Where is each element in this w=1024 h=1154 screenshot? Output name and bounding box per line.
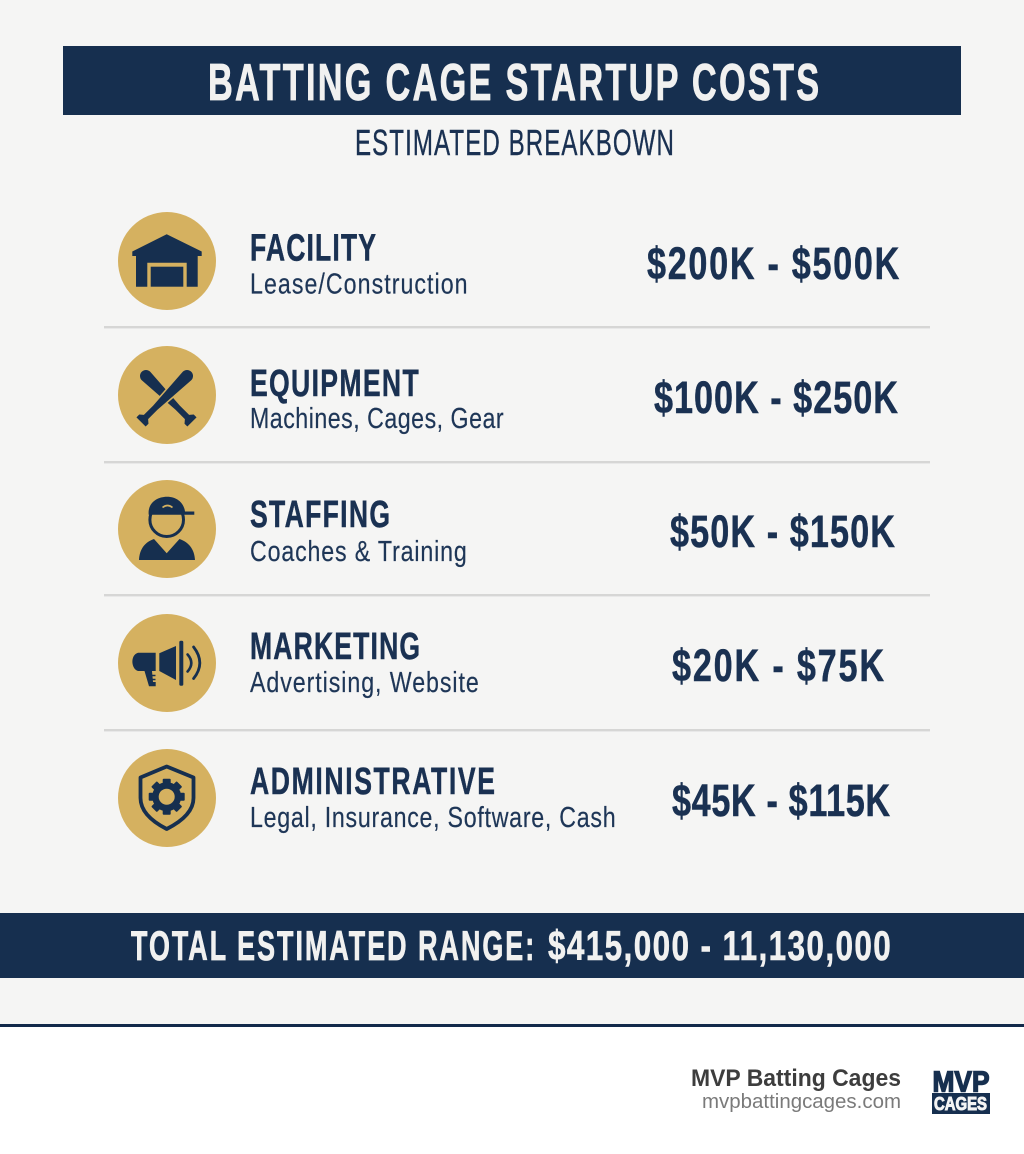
staffing cost: $50K - $150K	[670, 508, 895, 557]
logo: CAGES	[934, 1094, 987, 1114]
brand name: MVP Batting Cages	[691, 1065, 901, 1092]
marketing label: MARKETING	[250, 624, 420, 667]
icon: warehouse	[118, 212, 216, 310]
icon: crossed bats	[118, 346, 216, 444]
website: mvpbattingcages.com	[702, 1091, 901, 1113]
marketing cost: $20K - $75K	[672, 642, 884, 691]
equipment cost: $100K - $250K	[654, 374, 898, 423]
row: staffing	[118, 480, 895, 578]
icon: megaphone	[118, 614, 216, 712]
administrative cost: $45K - $115K	[672, 777, 890, 826]
title banner	[63, 46, 961, 115]
title banner: BATTING CAGE STARTUP COSTS	[208, 54, 819, 112]
facility label: FACILITY	[250, 226, 376, 269]
total banner: TOTAL ESTIMATED RANGE:	[131, 923, 534, 970]
staffing label: STAFFING	[250, 492, 390, 535]
icon: coach with cap	[118, 480, 216, 578]
icon: shield with gear	[118, 749, 216, 847]
row: marketing	[118, 614, 884, 712]
subtitle: ESTIMATED BREAKBOWN	[355, 123, 674, 163]
facility cost: $200K - $500K	[647, 240, 899, 289]
facility description: Lease/Construction	[250, 267, 468, 300]
logo: MVP	[932, 1066, 990, 1098]
footer	[0, 1024, 1024, 1154]
row: administrative	[118, 749, 890, 847]
administrative label: ADMINISTRATIVE	[250, 759, 495, 802]
row: facility	[118, 212, 899, 310]
administrative description: Legal, Insurance, Software, Cash	[250, 800, 616, 834]
marketing description: Advertising, Website	[250, 665, 479, 699]
total banner: $415,000 - 11,130,000	[548, 922, 891, 969]
equipment description: Machines, Cages, Gear	[250, 401, 504, 435]
logo	[932, 1066, 990, 1114]
equipment label: EQUIPMENT	[250, 361, 419, 404]
row: equipment	[118, 346, 898, 444]
staffing description: Coaches & Training	[250, 534, 467, 568]
total banner	[0, 913, 1024, 978]
